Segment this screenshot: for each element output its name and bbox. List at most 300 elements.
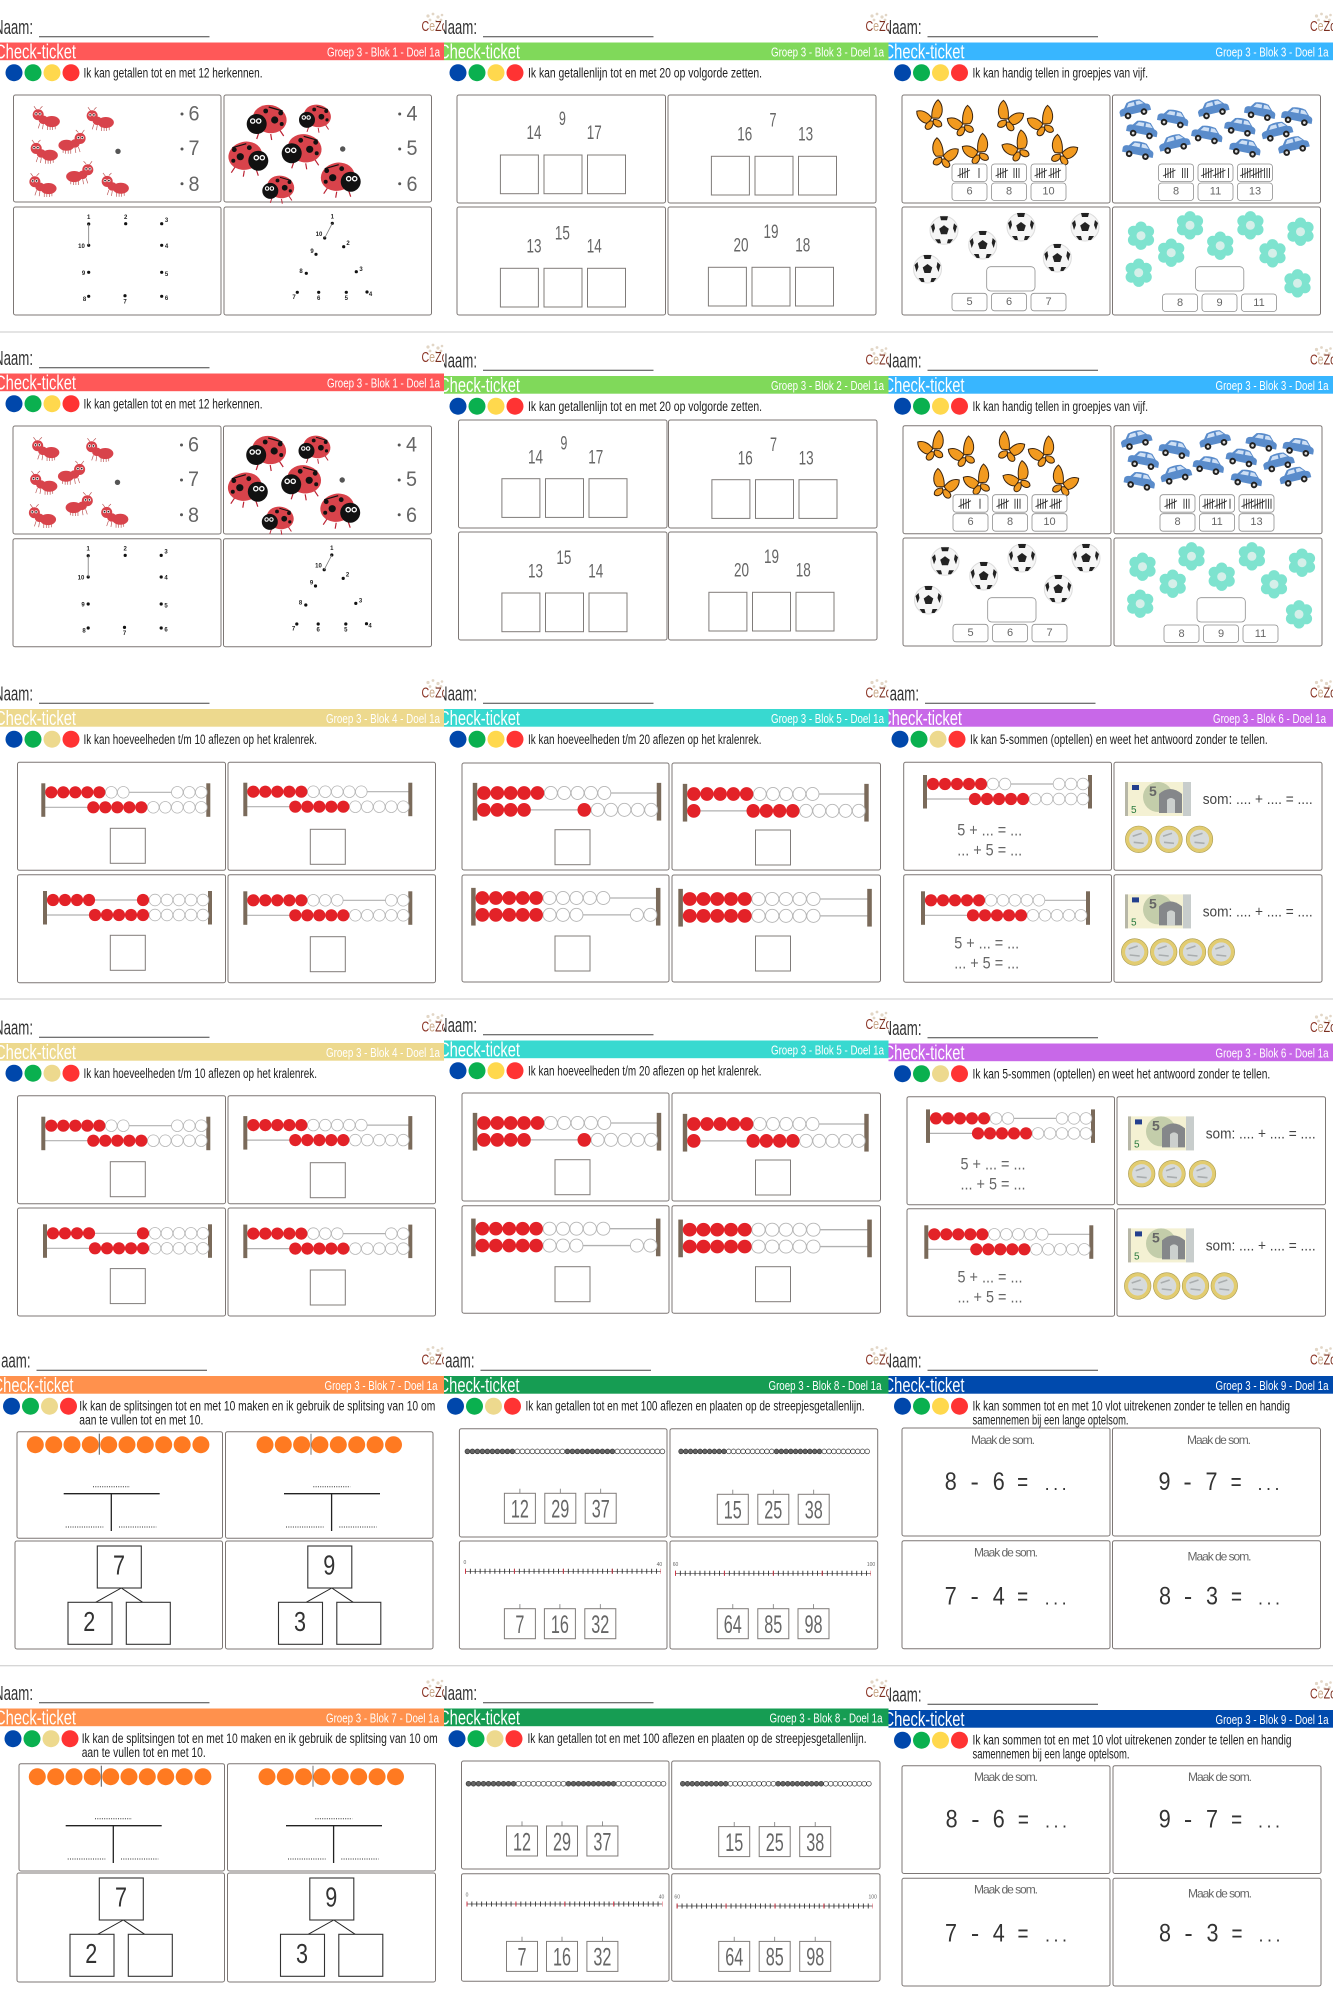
ticket header: Ik kan getallen tot en met 12 herkennen. [84,396,262,411]
panel: som 8-6: 6 [993,1805,1005,1833]
panel: connect the dots triangle: 8 [299,601,303,607]
panel: butterflies: 8 [1007,516,1013,528]
panel: ladybugs: 6 [406,173,418,196]
panel: order 19 20 18 [668,532,877,640]
panel: abacus 3 [462,1206,669,1313]
ticket header: Check-ticket [439,1040,520,1062]
panel: order 15 13 14: 13 [528,562,543,582]
panel: abacus sums 2 [904,875,1112,982]
panel: som 7-4: 7 [945,1582,957,1610]
ticket header: aan te vullen tot en met 10. [79,1412,203,1428]
panel: som 8-3: = [1231,1583,1242,1611]
panel: abacus sums 2: 5 + ... = ... [958,1267,1022,1286]
panel: number line 64 85 98: 60 [674,1895,680,1901]
panel: som 8-6: 6 [993,1468,1005,1496]
ticket header: Check-ticket [884,1709,965,1731]
panel: order 9 14 17: 17 [588,448,603,468]
panel: som 7-4: Maak de som. [974,1882,1038,1896]
panel: order 7 16 13: 7 [770,111,776,132]
panel: connect the dots square [13,539,221,647]
panel: abacus sums 2: 5 + ... = ... [954,933,1019,952]
panel: number line 7 16 32: 16 [553,1944,571,1972]
panel: som 9-7 [1112,1428,1320,1536]
panel: number line 64 85 98 [672,1874,880,1981]
panel: number line 64 85 98: 60 [673,1562,678,1568]
panel: order 7 16 13: 7 [770,435,777,456]
panel: connect the dots square: 4 [165,244,169,250]
panel: som 7-4 [902,1878,1110,1986]
panel: money sum 1: 5 [1134,1139,1140,1150]
panel: som 8-3: ... [1258,1589,1280,1609]
panel: som 8-3: - [1184,1920,1193,1948]
panel: money sum 1: som: .... + .... = .... [1203,791,1313,808]
panel: order 9 14 17: 9 [560,433,567,454]
panel: money sum 2: som: .... + .... = .... [1203,903,1313,920]
panel: split tree 9 [228,1873,436,1982]
panel: orange dots 8 [226,1432,433,1538]
panel: som 7-4: 4 [993,1920,1005,1948]
panel: ladybugs: 5 [406,137,418,160]
panel: cars: 13 [1250,516,1263,528]
panel: connect the dots triangle [224,539,432,647]
panel: footballs: 6 [1007,627,1013,639]
panel: split tree 9: 3 [294,1606,306,1637]
panel: bead line 12 29 37: 12 [513,1828,531,1856]
panel: som 8-3: 3 [1206,1583,1218,1611]
panel: bead line 15 25 38 [672,1761,880,1869]
panel: abacus sums 1: 5 + ... = ... [957,820,1022,839]
panel: money sum 1: som: .... + .... = .... [1206,1125,1316,1142]
ticket header [882,12,1333,82]
panel: som 9-7: 9 [1158,1468,1170,1496]
panel: som 9-7: ... [1258,1474,1280,1494]
panel: connect the dots triangle: 3 [359,267,363,273]
panel: bead line 15 25 38: 38 [805,1497,823,1525]
ticket header: Naam: [438,1015,477,1037]
panel: som 9-7: - [1183,1468,1192,1496]
panel: butterflies: 6 [967,516,974,528]
ticket header: Naam: [438,17,477,39]
panel: som 8-6: ... [1045,1474,1067,1494]
ticket header [438,679,892,748]
panel: order 15 13 14 [457,207,666,315]
panel: abacus sums 2: ... + 5 = ... [958,1288,1022,1307]
panel: cars: 8 [1173,186,1179,198]
panel: abacus 4 [228,875,436,983]
panel: order 15 13 14: 15 [556,548,571,569]
panel: ladybugs: 4 [406,434,417,457]
panel: som 9-7 [1113,1766,1321,1874]
panel: split tree 7: 7 [115,1881,127,1912]
panel: bead line 15 25 38: 25 [766,1829,784,1857]
panel: split tree 9: 9 [323,1549,335,1580]
panel: cars [1114,426,1322,534]
panel: som 7-4: ... [1045,1926,1067,1946]
ticket header: Naam: [436,1350,474,1372]
panel: number line 7 16 32 [459,1541,667,1649]
ticket header: Check-ticket [884,1375,965,1397]
panel: connect the dots square: 2 [124,215,128,221]
panel: connect the dots triangle: 7 [292,295,296,301]
ticket: row 3 blok 6 5-sommen [880,679,1333,982]
panel: connect the dots triangle: 5 [344,628,348,634]
ticket header: Check-ticket [439,42,520,64]
panel: order 19 20 18: 19 [764,547,779,568]
ticket header: Check-ticket [884,375,965,397]
panel: number line 7 16 32: 32 [593,1944,611,1972]
ticket header: Check-ticket [881,708,962,730]
panel: order 15 13 14: 14 [587,237,602,258]
panel: som 9-7: = [1231,1805,1242,1833]
panel: som 8-3 [1112,1541,1320,1649]
panel: connect the dots square: 3 [164,550,168,556]
panel: som 9-7: 9 [1159,1805,1171,1833]
panel: money sum 2 [1114,875,1322,982]
panel: som 8-3: - [1184,1583,1192,1611]
ticket header: Ik kan getallenlijn tot en met 20 op volgorde zetten. [528,65,762,80]
panel: order 7 16 13 [668,420,877,528]
panel: abacus 4 [672,1206,880,1313]
panel: flowers: 11 [1255,628,1266,640]
panel: ladybugs [224,426,432,535]
panel: cars [1112,95,1320,203]
panel: ants: 7 [188,137,200,160]
panel: connect the dots square: 6 [165,296,169,302]
panel: connect the dots triangle: 2 [346,573,350,579]
panel: abacus 3 [18,1208,226,1316]
ticket: row 1 blok 1 getallen herkennen [0,13,448,315]
panel: flowers [1112,207,1320,315]
ticket header: Check-ticket [884,1042,965,1064]
panel: abacus 1 [18,1096,226,1204]
panel: connect the dots square: 9 [82,271,86,277]
ticket: row 6 blok 7 splitsingen [0,1679,448,1982]
panel: som 8-3: Maak de som. [1188,1550,1252,1564]
panel: number line 7 16 32: 40 [659,1895,664,1901]
ticket: row 1 blok 3 tellen in groepjes [882,13,1333,315]
ticket: row 2 blok 1 getallen herkennen [0,344,448,647]
ticket: row 1 blok 3 getallenlijn [438,13,892,315]
panel: som 8-3: 8 [1159,1583,1171,1611]
panel: ladybugs [224,95,432,204]
panel: bead line 15 25 38: 15 [724,1497,742,1525]
ticket header: Ik kan hoeveelheden t/m 10 aflezen op het kralenrek. [84,1066,317,1081]
panel: number line 64 85 98: 100 [869,1895,877,1901]
panel: bead line 12 29 37: 12 [511,1496,529,1524]
panel: money sum 1: 5 [1152,1117,1160,1133]
panel: footballs: 7 [1045,296,1052,308]
panel: order 9 14 17: 9 [559,109,566,130]
panel: bead line 15 25 38: 25 [764,1497,782,1525]
panel: money sum 2: 5 [1152,1229,1160,1245]
panel: orange dots 8 [228,1764,436,1871]
panel: money sum 1 [1117,1097,1326,1205]
ticket: row 2 blok 3 tellen in groepjes [882,346,1333,646]
panel: som 8-6: 8 [945,1468,957,1496]
panel: number line 64 85 98 [670,1541,878,1649]
ticket: row 2 blok 2 getallenlijn [438,346,892,640]
ticket header: Naam: [882,350,922,372]
panel: som 8-6: ... [1045,1811,1067,1831]
panel: connect the dots triangle: 2 [346,241,350,247]
panel: ladybugs: 6 [406,504,417,527]
panel: connect the dots square [14,207,221,315]
panel: som 8-3 [1113,1878,1321,1986]
ticket: row 4 blok 5 kralenrek tot 20 [438,1011,892,1313]
panel: abacus 1 [18,762,226,870]
panel: bead line 12 29 37: 29 [553,1828,571,1856]
separator lines [0,332,1333,1666]
panel: ladybugs: 4 [406,103,418,126]
ticket header [882,1346,1333,1428]
panel: connect the dots triangle: 1 [330,546,334,552]
panel: som 8-6: Maak de som. [971,1433,1035,1447]
panel: som 8-3: = [1232,1920,1242,1948]
panel: cars: 11 [1210,186,1221,198]
panel: order 19 20 18: 18 [796,561,811,582]
ticket: row 6 blok 9 sommen tot 10 [882,1680,1333,1986]
panel: order 7 16 13: 16 [738,448,753,470]
ticket header: Ik kan handig tellen in groepjes van vijf. [972,65,1148,80]
panel: flowers: 8 [1177,297,1183,309]
ticket header [438,1010,892,1080]
panel: connect the dots triangle [224,207,432,315]
ticket: row 4 blok 4 kralenrek tot 10 [0,1013,448,1316]
panel: butterflies [903,426,1111,534]
ticket header: Check-ticket [438,1375,520,1397]
panel: som 7-4: ... [1045,1588,1067,1608]
panel: connect the dots square: 8 [83,297,87,303]
panel: cars: 8 [1174,516,1181,528]
panel: connect the dots square: 7 [123,300,127,306]
ticket header [438,12,892,82]
panel: flowers: 11 [1253,297,1265,309]
panel: number line 64 85 98: 64 [724,1611,742,1639]
panel: som 8-6: Maak de som. [974,1770,1038,1784]
panel: connect the dots triangle: 6 [317,296,321,302]
panel: money sum 2: som: .... + .... = .... [1206,1237,1316,1254]
panel: som 8-6: - [971,1468,979,1496]
panel: order 7 16 13: 16 [737,125,752,146]
panel: order 7 16 13: 13 [799,448,814,470]
panel: abacus sums 2 [907,1209,1114,1316]
panel: orange dots 10 [19,1764,224,1871]
ticket header: Naam: [438,684,477,706]
panel: connect the dots square: 1 [87,547,91,553]
panel: ants: 8 [188,504,199,527]
panel: number line 7 16 32: 0 [466,1893,469,1899]
panel: connect the dots triangle: 1 [331,214,335,220]
panel: abacus 2 [228,1096,436,1204]
ticket header: Check-ticket [439,375,520,397]
ticket header: Naam: [880,684,919,706]
panel: connect the dots square: 3 [165,218,169,224]
panel: connect the dots square: 9 [81,603,85,609]
ticket header [882,1680,1333,1762]
panel: order 9 14 17: 14 [528,448,543,468]
panel: som 8-6: 8 [946,1805,958,1833]
ticket header: Check-ticket [884,42,965,64]
panel: number line 7 16 32 [462,1874,669,1981]
ticket header: Ik kan getallen tot en met 12 herkennen. [84,65,262,80]
panel: bead line 12 29 37: 29 [551,1496,569,1524]
panel: som 9-7: = [1231,1468,1242,1496]
ticket header: Naam: [882,1350,922,1372]
panel: split tree 7 [15,1541,222,1649]
panel: footballs: 6 [1006,296,1012,308]
panel: order 15 13 14 [458,532,667,640]
ticket header: aan te vullen tot en met 10. [82,1745,206,1760]
panel: abacus 3 [462,875,669,982]
panel: connect the dots triangle: 9 [310,581,314,587]
ticket header: Ik kan getallenlijn tot en met 20 op volgorde zetten. [528,399,762,414]
panel: order 15 13 14: 13 [526,237,542,258]
panel: som 9-7: Maak de som. [1188,1770,1252,1784]
panel: abacus 2 [228,762,436,870]
panel: abacus sums 1: ... + 5 = ... [957,840,1022,859]
panel: abacus 1 [462,1093,669,1201]
ticket header [438,1678,892,1748]
panel: som 8-3: Maak de som. [1188,1887,1252,1901]
panel: ladybugs: 5 [406,468,417,491]
panel: flowers [1114,538,1322,646]
panel: butterflies: 10 [1043,516,1056,528]
ticket: row 5 blok 9 sommen tot 10 [882,1346,1333,1649]
panel: bead line 12 29 37: 37 [593,1828,611,1856]
panel: order 15 13 14: 15 [555,223,570,244]
panel: order 9 14 17 [457,95,666,203]
panel: som 9-7: - [1184,1805,1192,1833]
panel: som 9-7: Maak de som. [1187,1433,1251,1447]
panel: connect the dots square: 6 [164,628,168,634]
ticket header: samennemen bij een lange optelsom. [972,1746,1130,1762]
panel: connect the dots triangle: 3 [359,599,363,605]
panel: connect the dots square: 8 [82,629,86,635]
panel: som 7-4: 4 [993,1582,1005,1610]
panel: flowers: 9 [1216,297,1223,309]
panel: number line 7 16 32: 7 [515,1611,524,1639]
ticket header: samennemen bij een lange optelsom. [972,1412,1128,1428]
panel: money sum 2: 5 [1149,895,1157,911]
ticket header: Ik kan hoeveelheden t/m 10 aflezen op het kralenrek. [84,732,317,747]
ticket header [438,346,892,415]
panel: number line 7 16 32: 16 [551,1611,569,1639]
panel: order 19 20 18: 20 [734,561,749,582]
ticket: row 4 blok 6 5-sommen [882,1014,1333,1316]
panel: som 8-6 [902,1766,1110,1874]
ticket header [880,679,1333,748]
panel: som 7-4: = [1017,1582,1028,1610]
panel: som 7-4: 7 [945,1920,957,1948]
panel: number line 7 16 32: 40 [657,1562,662,1568]
panel: money sum 2: 5 [1131,917,1137,928]
panel: som 8-3: 3 [1206,1920,1218,1948]
panel: abacus 3 [18,875,226,983]
panel: number line 64 85 98: 85 [764,1611,782,1639]
panel: som 9-7: 7 [1206,1805,1218,1833]
panel: bead line 12 29 37 [462,1761,669,1869]
panel: bead line 12 29 37: 37 [592,1496,610,1524]
panel: split tree 9: 9 [325,1881,337,1912]
panel: som 8-6: = [1018,1805,1029,1833]
panel: cars: 13 [1249,186,1261,198]
panel: som 9-7: 7 [1206,1468,1218,1496]
panel: som 8-3: 8 [1159,1920,1171,1948]
ticket: row 5 blok 8 streepjesgetallenlijn [436,1346,892,1649]
panel: number line 64 85 98: 98 [806,1944,824,1972]
panel: connect the dots triangle: 8 [299,269,303,275]
panel: order 9 14 17 [458,420,667,528]
panel: som 7-4 [902,1541,1110,1649]
panel: money sum 1 [1114,762,1322,870]
panel: ants [13,426,221,534]
panel: split tree 7 [17,1873,224,1982]
panel: orange dots 10 [17,1432,222,1538]
panel: connect the dots square: 10 [78,244,85,250]
panel: connect the dots triangle: 4 [368,624,372,630]
panel: footballs: 7 [1046,627,1053,639]
panel: connect the dots square: 5 [165,272,169,278]
ticket header [0,1013,448,1082]
panel: footballs: 5 [967,627,974,639]
panel: order 7 16 13 [668,95,876,203]
panel: butterflies: 8 [1006,186,1012,198]
panel: order 15 13 14: 14 [588,562,604,582]
panel: number line 7 16 32: 7 [518,1944,526,1972]
panel: abacus 2 [672,1093,880,1201]
panel: footballs [903,538,1111,646]
ticket header [882,1014,1333,1082]
panel: butterflies: 10 [1042,186,1055,198]
panel: connect the dots triangle: 6 [317,628,321,634]
panel: connect the dots triangle: 10 [315,564,322,570]
panel: ants [14,95,221,202]
panel: ants: 6 [188,103,200,126]
panel: footballs [902,207,1110,315]
panel: connect the dots square: 4 [164,576,168,582]
panel: order 9 14 17: 17 [587,123,602,144]
panel: abacus sums 1 [904,762,1112,870]
panel: bead line 15 25 38: 38 [806,1829,824,1857]
panel: order 7 16 13: 13 [798,125,813,146]
panel: som 8-6 [902,1428,1110,1536]
ticket header: Ik kan handig tellen in groepjes van vijf. [972,399,1148,414]
panel: order 19 20 18: 20 [734,236,748,257]
panel: number line 64 85 98: 64 [725,1944,743,1972]
panel: connect the dots square: 1 [87,215,91,221]
panel: flowers: 9 [1218,628,1224,640]
ticket header: Ik kan hoeveelheden t/m 20 aflezen op het kralenrek. [528,1063,762,1078]
panel: order 19 20 18: 18 [795,236,810,257]
panel: butterflies: 6 [966,186,973,198]
panel: bead line 15 25 38: 15 [725,1829,743,1857]
panel: connect the dots triangle: 10 [316,232,323,238]
panel: money sum 2 [1117,1209,1326,1316]
ticket: row 5 blok 7 splitsingen [0,1346,448,1649]
panel: abacus 4 [228,1208,436,1316]
panel: ants: 8 [188,173,200,196]
panel: cars: 11 [1211,516,1223,528]
ticket header: Naam: [438,350,477,372]
panel: connect the dots triangle: 9 [310,249,314,255]
panel: footballs: 5 [966,296,973,308]
ticket: row 3 blok 5 kralenrek tot 20 [438,679,892,982]
panel: abacus 2 [672,763,880,870]
ticket header [882,346,1333,415]
panel: som 7-4: = [1018,1920,1028,1948]
panel: ants: 7 [188,468,199,491]
ticket header: Naam: [882,1018,922,1040]
